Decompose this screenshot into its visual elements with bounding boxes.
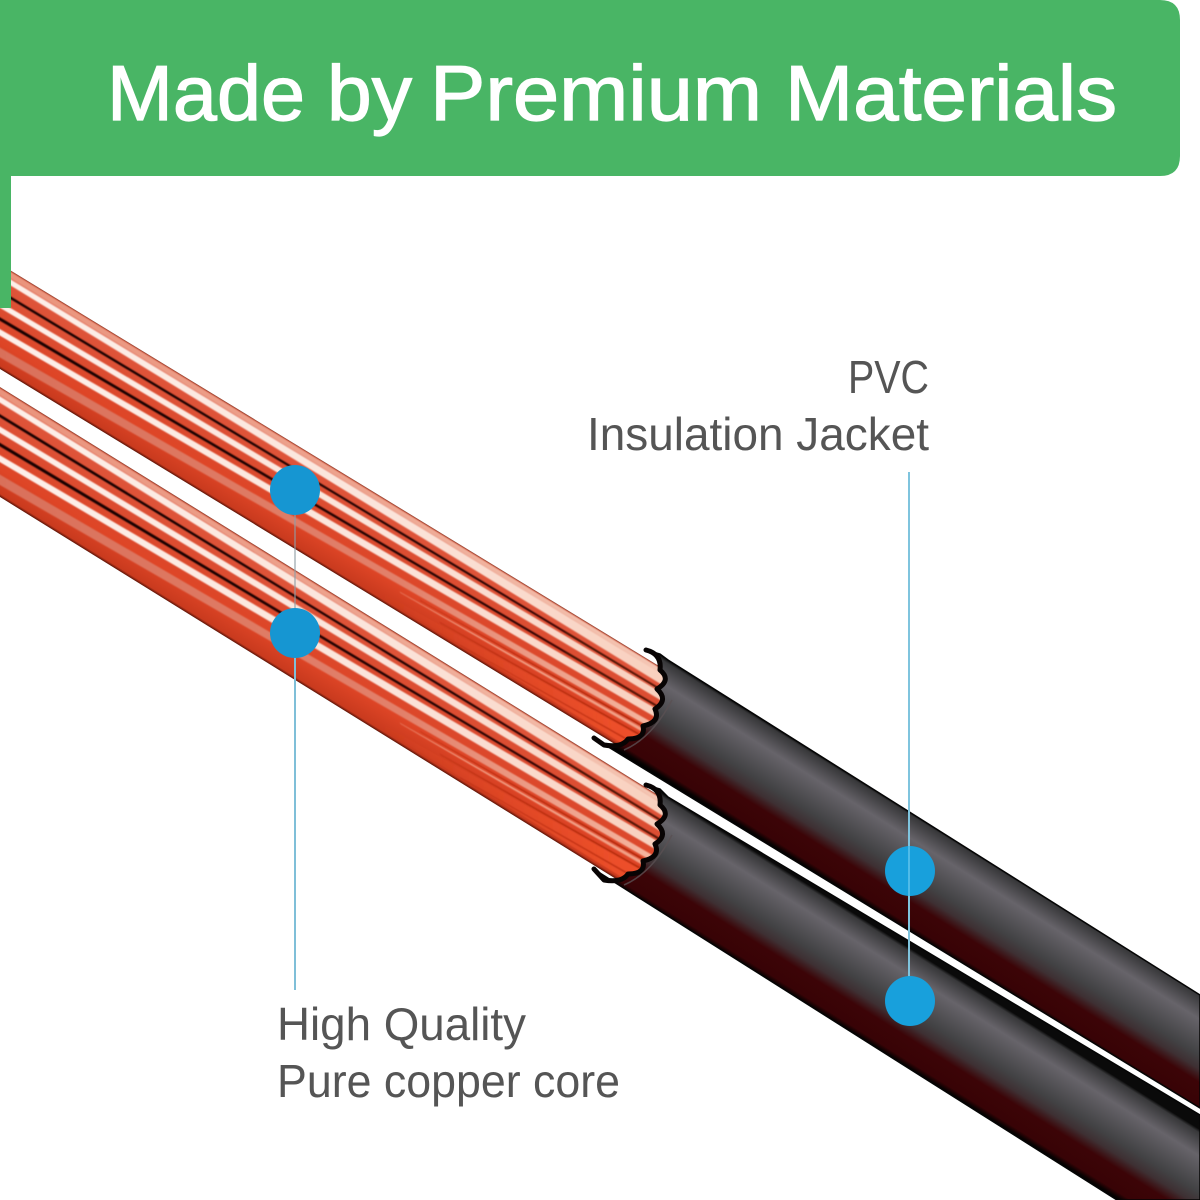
marker dot: upper copper bbox=[270, 465, 320, 515]
label: high quality pure copper core bbox=[277, 998, 620, 1107]
title: Made bbox=[107, 49, 305, 137]
upper PVC jacket bbox=[592, 650, 1200, 1108]
marker dot: lower jacket bbox=[885, 976, 935, 1026]
label: PVC insulation jacket bbox=[587, 351, 929, 460]
green header banner bbox=[0, 0, 1180, 308]
leader line: copper core bbox=[294, 510, 296, 990]
title: by bbox=[327, 49, 412, 137]
lower copper core strands bbox=[0, 381, 670, 912]
marker dot: lower copper bbox=[270, 608, 320, 658]
upper copper core strands bbox=[0, 258, 670, 778]
label: high quality pure copper core: Pure copper core bbox=[277, 1055, 620, 1107]
title bbox=[107, 49, 1117, 137]
leader line: PVC jacket bbox=[908, 472, 910, 985]
title: Materials bbox=[785, 49, 1117, 137]
label: PVC insulation jacket: Insulation Jacket bbox=[587, 408, 929, 460]
marker dot: upper jacket bbox=[885, 846, 935, 896]
title: Premium bbox=[430, 49, 762, 137]
label: PVC insulation jacket: PVC bbox=[848, 351, 929, 403]
label: high quality pure copper core: High Quality bbox=[277, 998, 526, 1050]
lower PVC jacket bbox=[592, 785, 1200, 1200]
